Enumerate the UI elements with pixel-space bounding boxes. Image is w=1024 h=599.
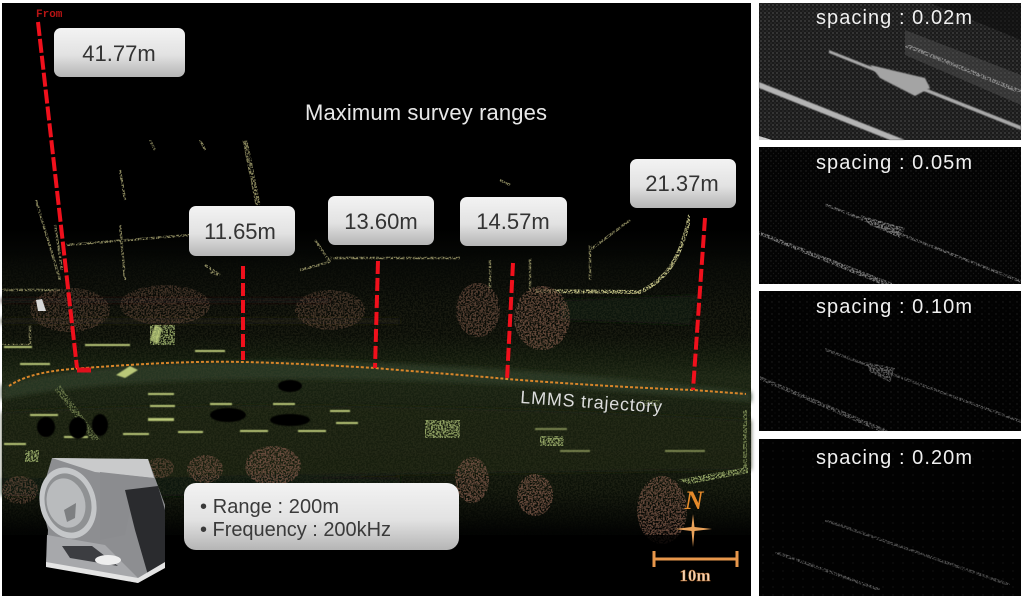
trees	[2, 283, 687, 544]
spec box	[184, 483, 459, 550]
car shadows	[37, 380, 310, 439]
heading: Maximum survey ranges	[305, 100, 547, 125]
trajectory line	[9, 362, 746, 394]
label: spacing : 0.20m	[816, 447, 972, 469]
trajectory label: LMMS trajectory	[520, 387, 663, 417]
speckled vegetation	[25, 325, 748, 484]
dark lower foreground	[2, 535, 751, 596]
panel: spacing 0.20m	[759, 439, 1021, 596]
callout 14.57m	[460, 197, 567, 246]
panel: spacing 0.02m	[759, 3, 1021, 140]
scale bar: 10m	[679, 566, 711, 585]
callout 41.77m: 41.77m	[82, 41, 156, 66]
range line 11.65m	[241, 266, 245, 360]
from label: From	[36, 9, 63, 21]
label: spacing : 0.05m	[816, 152, 972, 174]
callout 13.60m	[328, 196, 434, 245]
callout 21.37m: 21.37m	[645, 171, 719, 196]
label: spacing : 0.10m	[816, 296, 972, 318]
range line 13.60m	[375, 261, 378, 368]
panel: spacing 0.10m	[759, 291, 1021, 431]
building outlines	[2, 140, 690, 345]
label: spacing : 0.02m	[816, 7, 972, 29]
icon: north compass: N	[684, 486, 705, 515]
range line 21.37m	[693, 218, 705, 390]
callout 41.77m	[54, 28, 185, 77]
icon: laser scanner	[32, 458, 165, 583]
range line 14.57m	[507, 263, 513, 380]
road markings	[4, 325, 705, 452]
panel: point cloud map	[2, 3, 751, 596]
spec box: • Range : 200m	[200, 496, 339, 518]
spec box: • Frequency : 200kHz	[200, 519, 391, 541]
range line 41.77m	[38, 22, 91, 370]
scale bar	[654, 551, 737, 585]
callout 13.60m: 13.60m	[344, 209, 418, 234]
callout 14.57m: 14.57m	[476, 209, 550, 234]
callout 11.65m	[189, 206, 295, 256]
scattered ground points	[2, 250, 751, 535]
white pole	[36, 299, 46, 311]
callout 11.65m: 11.65m	[204, 219, 276, 244]
road surface bands	[2, 295, 751, 496]
icon: north compass	[675, 486, 712, 547]
callout 21.37m	[630, 159, 736, 208]
panel: spacing 0.05m	[759, 147, 1021, 284]
